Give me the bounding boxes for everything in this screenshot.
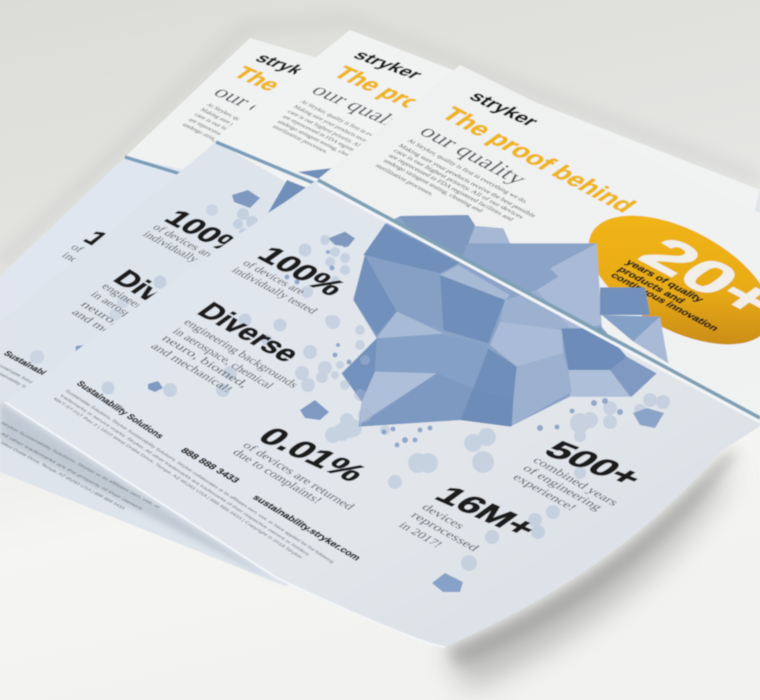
- back flyer paragraph: undergo stringent testing, cleaning and: [180, 122, 276, 170]
- middle flyer stat: 100%: 100%: [158, 206, 254, 261]
- middle flyer crystal fragment: [30, 168, 333, 364]
- caption line 2: individually tested: [229, 265, 321, 316]
- cube near 500+: [633, 408, 664, 428]
- stat: 16M+: [396, 482, 546, 553]
- intro paragraph: undergo stringent testing, cleaning and: [381, 158, 485, 214]
- front flyer lower tinted area: [5, 179, 760, 647]
- back flyer paragraph: care is our highest priority. All of our devices: [192, 112, 306, 169]
- stat: 500+: 500+: [536, 436, 651, 491]
- footer heading: Sustainability Solutions: Sustainability Solutions: [74, 380, 166, 441]
- middle flyer logo: stryker: [348, 48, 427, 82]
- Diverse caption: in aerospace, chemical: [170, 326, 277, 391]
- stat: Diverse: [148, 298, 307, 395]
- lower shadow beneath front flyer: [0, 402, 285, 586]
- badge caption line 1: years of quality: [623, 259, 706, 304]
- Diverse caption: neuro, biomed,: [159, 333, 252, 390]
- caption line 3: experience!: [510, 472, 580, 513]
- middle flyer footer legal: Stryker Sustainability Solutions, Stryker or its affiliates own, use, or: [0, 421, 162, 510]
- logo: stryker: stryker: [464, 89, 543, 130]
- middle flyer footer legal: West Drake Drive, Tempe, AZ 85283 USA | 888 888 3433: [0, 441, 127, 511]
- heading: The proof behind: The proof behind: [435, 103, 642, 217]
- footer phone: 888 888 3433: [178, 447, 242, 485]
- cube near 0.01%: [300, 400, 329, 420]
- back flyer heading: The proof behind: [227, 63, 422, 155]
- crystal illustration: [328, 215, 668, 427]
- badge caption line 3: continuous innovation: [608, 272, 720, 333]
- front flyer divider band: [318, 180, 760, 422]
- stat: Diverse: Diverse: [191, 298, 307, 367]
- middle flyer heading: The proof behind: [327, 63, 527, 157]
- middle flyer caption line 2: individually tested: [140, 229, 230, 279]
- back flyer stat caption line 2: individually tested: [59, 250, 149, 300]
- cube near Diverse: [148, 381, 163, 392]
- stat: 0.01%: [230, 423, 374, 512]
- badge: 20+ years: [568, 189, 760, 371]
- footer legal text: Sustainable Solutions, Stryker Sustainability Solutions, Stryker collaborates or its affiliates own, use, or have applied for the following: [63, 389, 336, 565]
- Diverse caption: and mechanical!: [148, 341, 236, 395]
- badge caption line 2: products and: [615, 266, 687, 305]
- middle flyer paragraph: care is our highest priority. All of our devices: [285, 109, 399, 166]
- middle flyer paragraph: At Stryker, quality is first in everything we do.: [298, 99, 410, 155]
- caption line 2: reprocessed: [408, 510, 483, 553]
- caption line 1: combined years: [530, 455, 622, 508]
- Diverse caption: engineering backgrounds: [181, 317, 301, 390]
- intro paragraph: care is our highest priority. All of our devices: [391, 148, 525, 220]
- middle flyer footer legal: [0, 362, 162, 512]
- middle flyer Diverse caption: engineering backgrounds: [99, 281, 217, 353]
- caption line 3: in 2017!: [396, 520, 446, 550]
- middle flyer caption line 1: of devices are: [150, 222, 219, 261]
- footer legal text: trademarks or service marks: Stryker. All other trademarks are trademarks of their respective owners or holders.: [58, 394, 312, 558]
- middle flyer paragraph: are reprocessed in FDA registered facilities and: [280, 114, 394, 171]
- middle flyer Diverse caption: in aerospace, chemical: [88, 289, 193, 353]
- caption line 2: due to complaints!: [230, 447, 325, 506]
- middle flyer paragraph: sterilization processes.: [270, 124, 330, 155]
- intro paragraph: sterilization processes.: [373, 163, 436, 197]
- middle flyer stat: Diverse: Diverse: [107, 266, 220, 337]
- middle flyer Diverse caption: and mechanical: [69, 307, 155, 360]
- middle flyer footer heading: Sustainability Solutions: [1, 350, 97, 403]
- intro paragraph: At Stryker, quality is first in everything we do.: [405, 138, 530, 205]
- caption line 1: devices: [419, 502, 468, 531]
- back flyer blue band: [125, 157, 230, 189]
- middle flyer Diverse caption: neuro, biomed,: [78, 299, 170, 355]
- panel: back flyer: [0, 38, 422, 330]
- footer url: sustainability.stryker.com: [250, 494, 363, 563]
- floating particles and small cubes: [102, 235, 670, 592]
- intro paragraph: are reprocessed in FDA registered facilities and: [386, 153, 515, 222]
- stat: 16M+: 16M+: [427, 482, 546, 542]
- middle flyer paragraph: Making sure your products receive the best possible: [291, 104, 414, 165]
- caption line 1: of devices are returned: [240, 440, 358, 512]
- stat: 500+: [510, 436, 651, 513]
- back flyer paragraph: At Stryker, quality is first in everything we do.: [204, 102, 316, 158]
- back flyer logo: stryker: [250, 51, 325, 84]
- back flyer paragraph: Making sure your products receive the best possible: [198, 107, 321, 168]
- back flyer stat caption line 1: of devices are: [68, 242, 137, 281]
- back flyer paragraph: are reprocessed in FDA registered facilities and: [186, 117, 300, 174]
- stat: 100%: 100%: [251, 242, 352, 301]
- middle flyer subheading: our quality: [306, 81, 422, 137]
- caption line 1: of devices are: [240, 258, 309, 297]
- panel: middle flyer: [0, 30, 760, 586]
- middle flyer footer legal: All other trademarks are the property of their owners: [0, 432, 145, 512]
- footer legal text: MKT-ST-017 Rev 2 | 1810 West Drake Drive, Tempe, AZ 85283 USA | 888 888 3433 | Copyright © 2018 Stryker: [51, 396, 305, 560]
- intro paragraph: Making sure your products receive the best possible: [396, 143, 537, 219]
- middle flyer blue band: [216, 142, 330, 190]
- front flyer upper white area: [318, 65, 760, 417]
- stat: 0.01%: 0.01%: [250, 423, 374, 487]
- stat: 100%: [229, 242, 352, 316]
- subheading: our quality: our quality: [413, 122, 532, 189]
- back flyer subheading: our quality: [208, 83, 324, 139]
- back flyer stat: 100%: 100%: [77, 226, 172, 281]
- caption line 2: of engineering: [520, 463, 606, 513]
- sheet edge highlight: [5, 402, 445, 647]
- middle flyer paragraph: undergo stringent testing, cleaning and: [275, 119, 371, 167]
- cube near 16M+: [432, 573, 463, 592]
